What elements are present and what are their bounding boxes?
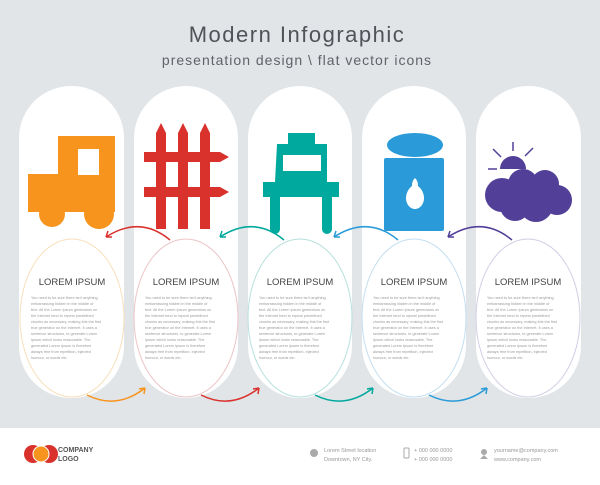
text: the Internet tend to repeat predefined [31,314,94,318]
text blocks: LOREM IPSUM [381,277,447,288]
footer contacts: Downtown, NY City. [324,457,373,463]
footer logo [24,445,94,463]
footer contacts: yourname@company.com [494,448,558,454]
text blocks: LOREM IPSUM [495,277,561,288]
text: always free from repetition, injected [31,350,91,354]
text: You need to be sure there isn't anything [31,296,98,300]
footer logo: COMPANY [58,447,94,454]
footer logo: LOGO [58,456,79,463]
text blocks [39,277,561,288]
text: text. All the Lorem Ipsum generators on [31,308,97,312]
text blocks: LOREM IPSUM [39,277,105,288]
icon: cloud with sun [485,142,572,222]
icon: desk [263,133,339,234]
footer contacts: www.company.com [493,457,541,463]
text: embarrassing hidden in the middle of [31,302,94,306]
column backgrounds [19,86,581,398]
subtitle: presentation design \ flat vector icons [162,52,432,68]
icon: jar with pear [384,133,444,231]
footer contacts: Lorem Street location [324,448,376,454]
arrows [87,227,512,401]
footer contacts: + 000 000 0000 [414,457,452,463]
title: Modern Infographic [189,22,405,47]
oval borders [20,239,580,397]
text: Ipsum which looks reasonable. The [31,338,90,342]
text: sentence structures, to generate Lorem [31,332,97,336]
text: humour, or words etc. [31,356,68,360]
text: generated Lorem Ipsum is therefore [31,344,91,348]
text blocks: LOREM IPSUM [153,277,219,288]
footer contacts [310,448,558,463]
icon: truck [28,136,115,229]
footer contacts: + 000 000 0000 [414,448,452,454]
text: chunks as necessary, making this the first [31,320,102,324]
text blocks: LOREM IPSUM [267,277,333,288]
icon: fence [144,123,229,229]
text: true generator on the Internet. It uses a [31,326,98,330]
